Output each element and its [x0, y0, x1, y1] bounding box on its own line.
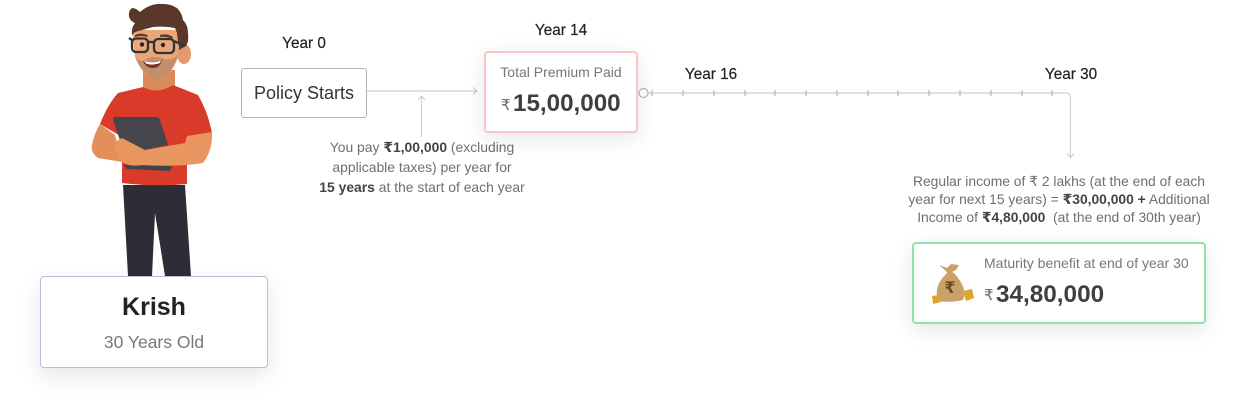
amount: 15,00,000 [513, 90, 621, 117]
amount: 34,80,000 [996, 281, 1104, 308]
card title: Total Premium Paid [500, 64, 622, 80]
text: regular income description: year for next 15 years) = ₹30,00,000 + Additional [908, 191, 1210, 207]
text: premium description [319, 139, 525, 195]
label: Year 30: Year 30 [1045, 66, 1097, 83]
text: regular income description: Income of ₹4,80,000 (at the end of 30th year) [917, 209, 1201, 225]
age: 30 Years Old [104, 332, 204, 352]
text: premium description: 15 years at the start of each year [319, 179, 525, 195]
label: Year 0: Year 0 [282, 35, 326, 52]
text: regular income description: Regular income of ₹ 2 lakhs (at the end of each [913, 173, 1205, 189]
card: Total Premium Paid [484, 51, 638, 133]
box: Policy Starts: Policy Starts [254, 83, 354, 103]
icon: money bag: ₹ [944, 280, 956, 297]
label: Year 14: Year 14 [535, 22, 587, 39]
icon: money bag [932, 264, 974, 304]
rupee sign: ₹ [501, 97, 511, 114]
card: Maturity benefit [912, 242, 1206, 324]
card: Krish [40, 276, 268, 368]
label: Year 16: Year 16 [685, 66, 737, 83]
name: Krish [122, 293, 186, 321]
text: premium description: applicable taxes) per year for [332, 159, 512, 175]
box: Policy Starts [241, 68, 367, 118]
text: regular income description [908, 173, 1210, 225]
card title: Maturity benefit at end of year 30 [984, 255, 1189, 271]
rupee sign: ₹ [984, 287, 994, 304]
text: premium description: You pay ₹1,00,000 (excluding [330, 139, 514, 155]
